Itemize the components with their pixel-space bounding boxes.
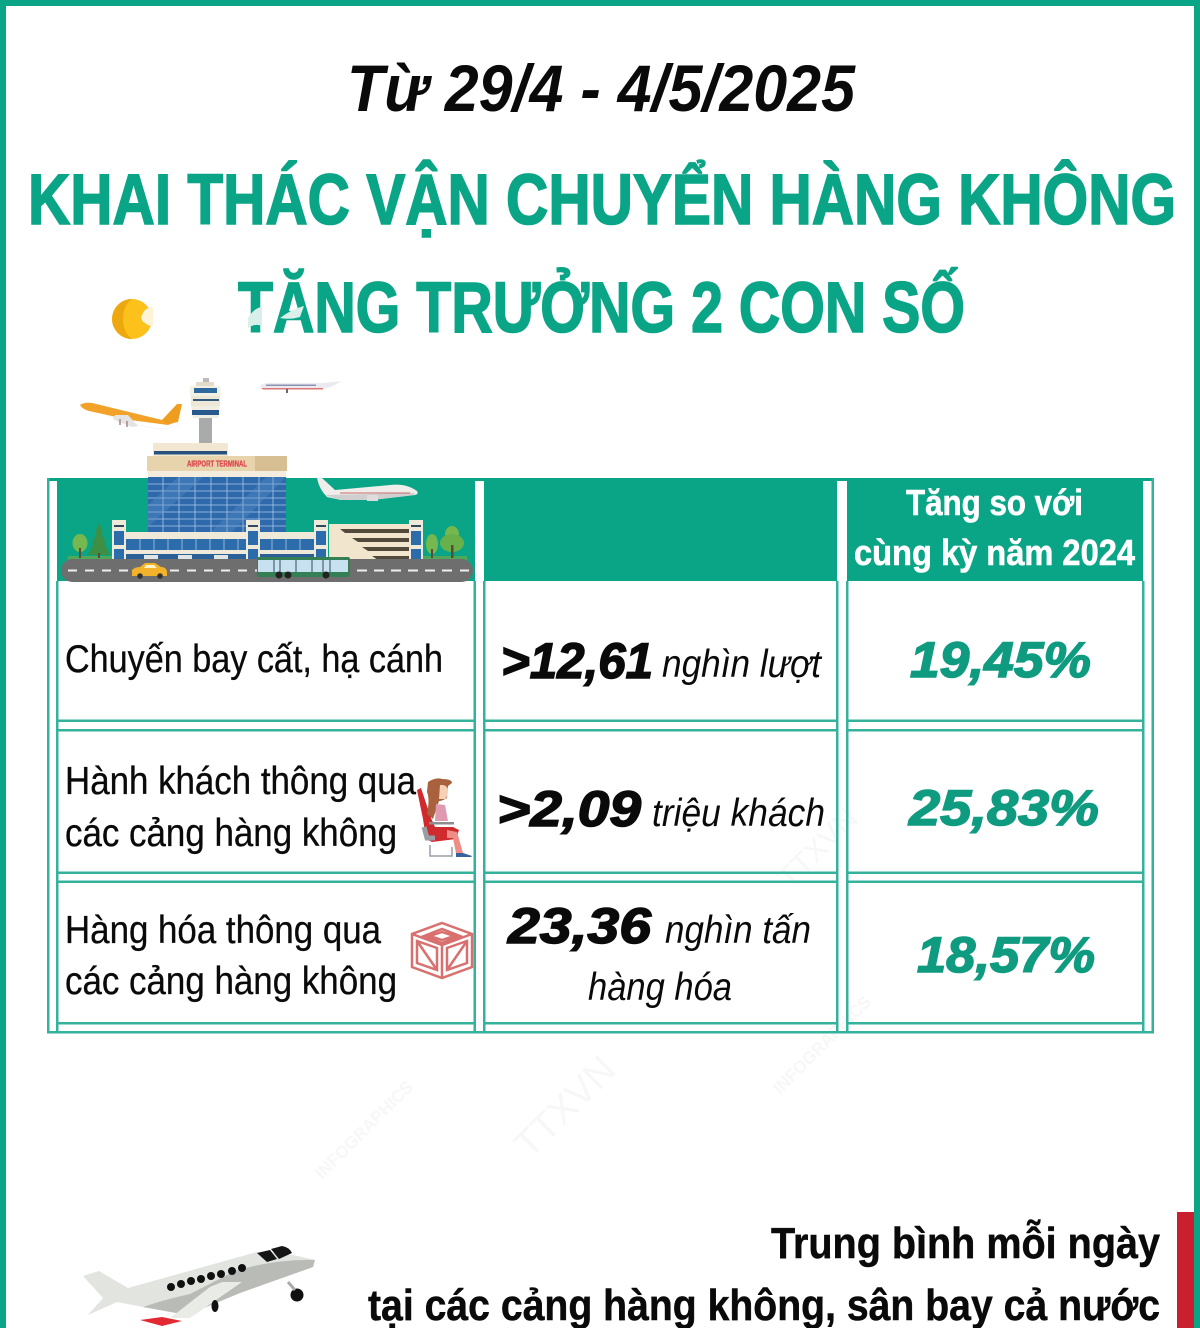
terminal roof	[147, 443, 287, 477]
growth percentages: 19,45%	[910, 632, 1091, 688]
icon: white propeller plane	[83, 1246, 315, 1326]
row labels: các cảng hàng không	[65, 960, 397, 1003]
row labels: Chuyến bay cất, hạ cánh	[65, 638, 443, 681]
icon: cargo crate	[412, 923, 472, 978]
title: TĂNG TRƯỞNG 2 CON SỐ	[238, 268, 965, 348]
column header text	[854, 482, 1135, 573]
values: cargo: nghìn tấn	[665, 909, 811, 952]
icon: girl in airplane seat	[417, 778, 472, 857]
terminal glass tower	[148, 477, 286, 533]
text: INFOGRAPHICS	[311, 1077, 417, 1183]
red accent bar	[1177, 1212, 1194, 1328]
values: cargo	[507, 898, 811, 1009]
values: cargo: hàng hóa	[588, 966, 732, 1009]
column header text: cùng kỳ năm 2024	[854, 532, 1135, 573]
icon: orange plane	[80, 403, 182, 429]
values: passengers: triệu khách	[652, 792, 825, 835]
title	[28, 160, 1176, 348]
row labels	[65, 638, 443, 1003]
parking building	[329, 520, 423, 562]
data table	[47, 478, 1154, 1034]
table header band	[47, 478, 1154, 581]
terminal roof: AIRPORT TERMINAL	[187, 460, 247, 468]
callout heading: Trung bình mỗi ngày	[771, 1218, 1160, 1268]
icon: taxi	[132, 563, 167, 579]
trees	[68, 523, 467, 560]
icon: sun	[112, 299, 153, 339]
column header text: Tăng so với	[906, 482, 1083, 523]
values: flights: >12,61	[501, 633, 653, 689]
icon: white plane	[317, 478, 418, 501]
row labels: Hàng hóa thông qua	[65, 909, 381, 952]
values: flights	[501, 633, 823, 689]
growth percentages: 25,83%	[908, 780, 1099, 836]
callout heading	[368, 1218, 1160, 1328]
icon: top plane	[260, 381, 342, 393]
illustration: airport terminal	[61, 378, 473, 582]
control tower	[190, 378, 221, 444]
text: TTXVN	[507, 1049, 624, 1166]
date heading: Từ 29/4 - 4/5/2025	[347, 51, 856, 125]
values: passengers: >2,09	[497, 781, 641, 837]
text: INFOGRAPHICS	[769, 992, 875, 1098]
row labels: các cảng hàng không	[65, 812, 397, 855]
text: TTXVN	[772, 802, 864, 895]
values: cargo: 23,36	[507, 898, 652, 954]
road	[61, 559, 473, 582]
values: flights: nghìn lượt	[662, 643, 823, 686]
growth percentages: 18,57%	[917, 927, 1095, 983]
values: passengers	[497, 781, 825, 837]
growth percentages	[908, 632, 1099, 983]
icon: bus	[257, 557, 350, 578]
row labels: Hành khách thông qua	[65, 760, 416, 803]
terminal low building	[112, 520, 328, 562]
